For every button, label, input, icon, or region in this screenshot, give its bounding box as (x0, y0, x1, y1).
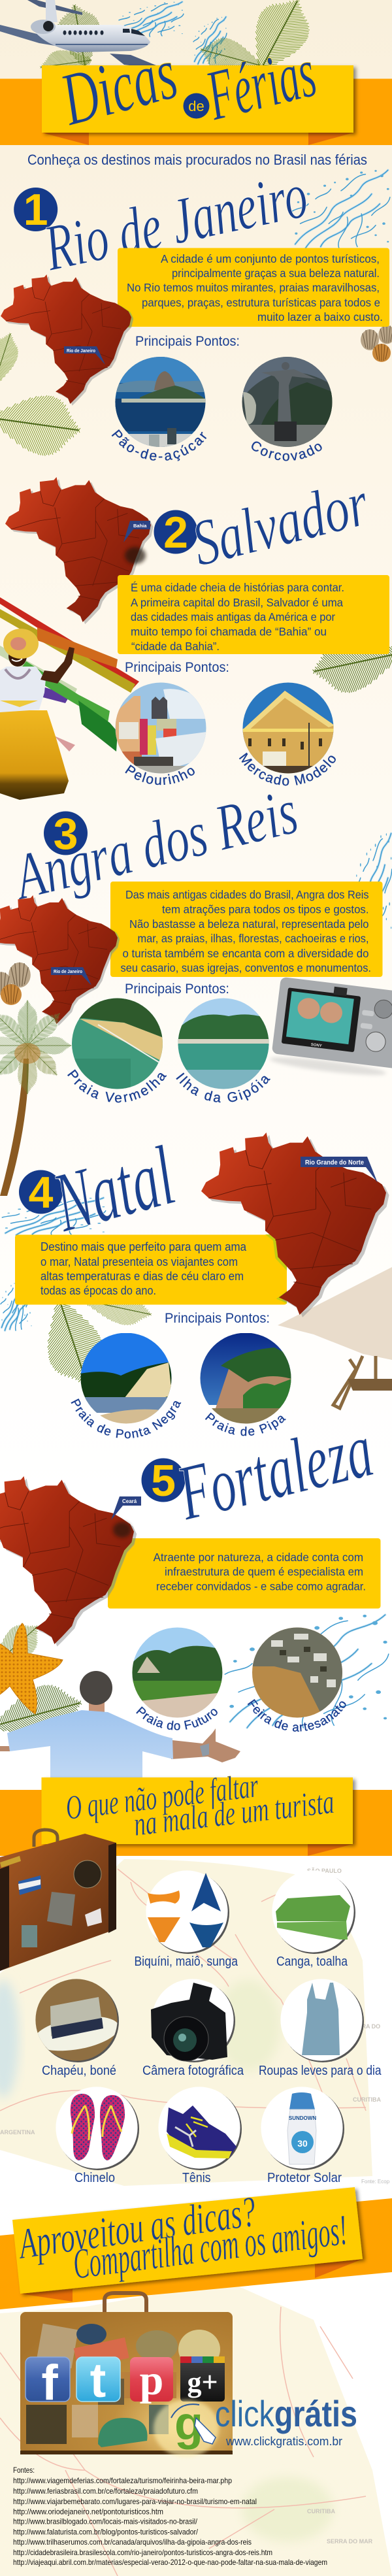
label: Tênis: Tênis (182, 2171, 211, 2185)
water splash (225, 1615, 389, 1728)
item: sunscreen: SUNDOWN (289, 2115, 316, 2121)
ribbon band: share (0, 2198, 392, 2309)
photo: Pão-de-açúcar (115, 357, 206, 448)
logo: clickgrátis: www.clickgratis.com.br (225, 2435, 342, 2448)
number badge 2: 2 (163, 508, 188, 557)
shells (0, 963, 31, 1005)
heading: Natal: Natal (44, 1129, 184, 1250)
text box: É uma cidade cheia de histórias para contar. (131, 581, 344, 594)
caption: Pelourinho: Pelourinho (125, 765, 195, 785)
camera: SONY (310, 1043, 322, 1048)
item: sunscreen: 30 (297, 2138, 308, 2149)
icon: Google plus: g+ (187, 2366, 218, 2398)
brown suitcase (0, 1830, 116, 1971)
heading line 1: Aproveitou as dicas? (14, 2188, 259, 2268)
item: towel (272, 1870, 355, 1954)
ribbon folds (42, 133, 353, 145)
logo: clickgrátis: g (174, 2398, 203, 2450)
text box: o mar, Natal presenteia os viajantes com (41, 1255, 238, 1268)
text box (108, 1538, 380, 1609)
map background: SÃO PAULO (307, 1868, 342, 1874)
text box (15, 1235, 287, 1304)
sources: http://www.trilhaserumos.com.br/canada/arquivos/ilha-da-gipoia-angra-dos-reis (13, 2537, 252, 2547)
sources: http://www.falaturista.com.br/blog/pontos-turisticos-salvador/ (13, 2528, 199, 2537)
map of Brazil: Rio de Janeiro (54, 968, 82, 974)
item: hat (31, 1979, 122, 2062)
badge: de (183, 93, 209, 119)
caption: Praia de Ponta Negra: Praia de Ponta Negra (71, 1398, 182, 1439)
text box: todas as épocas do ano. (41, 1284, 156, 1297)
item: sunscreen (261, 2087, 344, 2170)
label: Chapéu, boné: Chapéu, boné (42, 2064, 116, 2078)
palm fronds (0, 329, 84, 460)
map of Brazil: Rio de Janeiro (67, 348, 95, 354)
icon: Facebook (25, 2355, 70, 2411)
text box: tem atrações para todos os tipos e gostos. (162, 903, 368, 916)
section 1: Rio de Janeiro (0, 158, 392, 461)
water splash: top centre (193, 17, 227, 64)
sail boat (278, 1267, 392, 1408)
text box: seu casario, suas igrejas, conventos e monumentos. (120, 961, 371, 974)
text box: A cidade é um conjunto de pontos turísticos, (161, 252, 380, 265)
item: camera (151, 1979, 235, 2062)
badge: de: de (188, 98, 204, 114)
photo: Praia do Futuro (132, 1627, 223, 1719)
sources: http://www.feriasbrasil.com.br/ce/fortaleza/praiadofuturo.cfm (13, 2486, 198, 2496)
number badge 1 (14, 185, 57, 235)
item: tank top (280, 1979, 364, 2062)
icon: Pinterest (130, 2356, 173, 2404)
map of Brazil (199, 1132, 389, 1317)
label: Câmera fotográfica: Câmera fotográfica (142, 2064, 244, 2078)
ribbon band: mala (0, 1790, 392, 1856)
photo: Ilha da Gipóia (178, 998, 269, 1089)
header ribbon band (0, 78, 392, 145)
text box: das cidades mais antigas da América e por (131, 610, 335, 623)
text box: “cidade da Bahia”. (131, 640, 220, 653)
sources: http://www.viagemdeferias.com/fortaleza/turismo/feirinha-beira-mar.php (13, 2476, 232, 2485)
photo: Praia de Ponta Negra (80, 1333, 172, 1425)
logo: clickgrátis (154, 2393, 357, 2457)
title banner (42, 31, 353, 141)
map background (0, 1859, 392, 2576)
caption: Corcovado: Corcovado (252, 442, 322, 461)
palm fronds: header (38, 0, 321, 82)
caption: Praia de Pipa: Praia de Pipa (205, 1413, 286, 1436)
map background: SÃO PAULO (263, 2275, 297, 2282)
text box (110, 882, 383, 977)
item: sneaker (158, 2087, 242, 2170)
map source note: Fonte: Ecop (361, 2179, 390, 2185)
logo: clickgrátis: clickgrátis (215, 2393, 357, 2434)
text box: muito lazer a baixo custo. (257, 310, 383, 323)
text box: Não bastasse a beleza natural, representada pelo (129, 917, 368, 931)
text box: A primeira capital do Brasil, Salvador é uma (131, 596, 343, 609)
sources: http://www.brasilblogado.com/locais-mais-visitados-no-brasil/ (13, 2517, 198, 2526)
starfish (0, 1623, 63, 1714)
caption: Pão-de-açúcar: Pão-de-açúcar (111, 429, 206, 461)
label: Principais Pontos: Principais Pontos: (135, 334, 240, 349)
label: Principais Pontos: Principais Pontos: (125, 982, 229, 997)
baiana figure (0, 629, 74, 800)
text box: infraestrutura de quem é especialista em (165, 1565, 363, 1578)
map of Brazil (5, 477, 154, 624)
text box: muito tempo foi chamada de “Bahia” ou (131, 625, 327, 638)
map background: CURITIBA (307, 2508, 335, 2515)
palm tree (0, 1000, 71, 1196)
map of Brazil (1, 274, 133, 406)
icon: Twitter (76, 2353, 120, 2407)
text box: Das mais antigas cidades do Brasil, Angra dos Reis (125, 888, 369, 901)
photo: Pelourinho (115, 682, 206, 775)
airplane (0, 0, 167, 70)
number badge 3 (44, 809, 88, 859)
map of Brazil: Bahia (133, 523, 147, 529)
ribbons (0, 597, 139, 751)
map background: SERRA DO MAR (327, 2538, 373, 2545)
text box (118, 575, 389, 654)
text box: altas temperaturas e dias de céu claro em (41, 1270, 244, 1283)
label: Principais Pontos: Principais Pontos: (125, 660, 229, 675)
camera (269, 976, 392, 1080)
section 4: Natal (0, 1129, 392, 1439)
caption: Feira de artesanato: Feira de artesanato (247, 1699, 346, 1732)
sources: http://viajeaqui.abril.com.br/materias/especial-verao-2012-o-que-nao-pode-faltar-na-sua-mala-de-viagem (13, 2558, 327, 2567)
text box: No Rio temos muitos mirantes, praias maravilhosas, (127, 281, 380, 294)
man with open arms (0, 1671, 240, 1777)
icon: Google plus (180, 2356, 225, 2402)
text box: Atraente por natureza, a cidade conta com (154, 1551, 363, 1564)
number badge 4: 4 (29, 1168, 54, 1217)
label: Chinelo: Chinelo (74, 2171, 115, 2185)
caption: Praia do Futuro: Praia do Futuro (136, 1706, 218, 1730)
map of Brazil: Rio Grande do Norte (305, 1159, 364, 1166)
palm fronds (0, 1615, 88, 1751)
photo: Corcovado (242, 357, 333, 448)
caption: Mercado Modelo: Mercado Modelo (239, 753, 336, 785)
caption: Praia Vermelha: Praia Vermelha (67, 1069, 167, 1103)
text box: principalmente graças a sua beleza natural. (172, 267, 380, 280)
text box (118, 248, 389, 327)
text box: mar, as praias, ilhas, florestas, cachoeiras e rios, (137, 932, 368, 945)
sources (13, 2466, 327, 2567)
section 3: Angra dos Reis (0, 774, 392, 1209)
map of Brazil (0, 1476, 141, 1647)
water splash (1, 1198, 106, 1330)
map background: ARGENTINA (0, 2129, 35, 2136)
number badge 1: 1 (24, 185, 48, 235)
label: Principais Pontos: Principais Pontos: (165, 1311, 270, 1326)
sources: http://www.viajarbemebarato.com/lugares-para-viajar-no-brasil/turismo-em-natal (13, 2497, 257, 2506)
water splash: top left (119, 2, 184, 37)
map background: CURITIBA (353, 2096, 381, 2103)
number badge 5: 5 (151, 1456, 176, 1506)
palm fronds (33, 1285, 155, 1394)
number badge 5 (141, 1456, 186, 1506)
number badge 2 (154, 508, 197, 557)
palm frond (307, 626, 392, 699)
sources: http://cidadebrasileira.brasilescola.com/rio-janeiro/pontos-turisticos-angra-dos-reis.htm (13, 2548, 272, 2557)
photo: Feira de artesanato (252, 1627, 344, 1719)
section 5: Fortaleza (0, 1406, 389, 1777)
section 2: Salvador (0, 467, 392, 800)
title: Dicas: Dicas (52, 31, 185, 141)
label: Biquíni, maiô, sunga: Biquíni, maiô, sunga (135, 1955, 238, 1969)
subtitle: Conheça os destinos mais procurados no Brasil nas férias (27, 152, 367, 168)
banner: o que não pode faltar (42, 1777, 353, 1844)
caption: Ilha da Gipóia: Ilha da Gipóia (176, 1072, 270, 1103)
photo: Praia Vermelha (72, 998, 163, 1089)
text box: receber convidados - e sabe como agradar. (156, 1580, 366, 1593)
text box: parques, praças, estrutura turísticas para todos e (142, 296, 380, 309)
sources: http://www.oriodejaneiro.net/pontoturisticos.htm (13, 2507, 163, 2516)
item: bikini (146, 1870, 229, 1954)
ribbon fold (308, 1844, 353, 1856)
ribbon folds (20, 2259, 363, 2302)
text box: o turista também se encanta com a diversidade do (123, 947, 368, 960)
vintage suitcase (20, 2293, 233, 2454)
icon: Twitter: t (90, 2353, 106, 2407)
label: Protetor Solar: Protetor Solar (267, 2171, 342, 2185)
water splash (354, 833, 392, 936)
text box: Destino mais que perfeito para quem ama (41, 1240, 247, 1253)
map of Brazil: Ceará (122, 1498, 137, 1504)
photo: Praia de Pipa (200, 1333, 291, 1425)
sources: Fontes: (13, 2466, 35, 2475)
map of Brazil (0, 895, 120, 1026)
number badge 3: 3 (54, 809, 78, 859)
label: Canga, toalha: Canga, toalha (276, 1955, 348, 1969)
heading line 1: O que não pode faltar (64, 1767, 261, 1827)
map background: SERRA DO (350, 2023, 380, 2030)
number badge 4 (19, 1168, 63, 1217)
item: flip flops (56, 2087, 139, 2170)
banner: share (12, 2187, 363, 2294)
shells (361, 325, 392, 362)
icon: Facebook: f (41, 2355, 58, 2411)
photo: Mercado Modelo (242, 682, 335, 775)
water splash (292, 170, 390, 248)
icon: Pinterest: p (140, 2356, 163, 2404)
